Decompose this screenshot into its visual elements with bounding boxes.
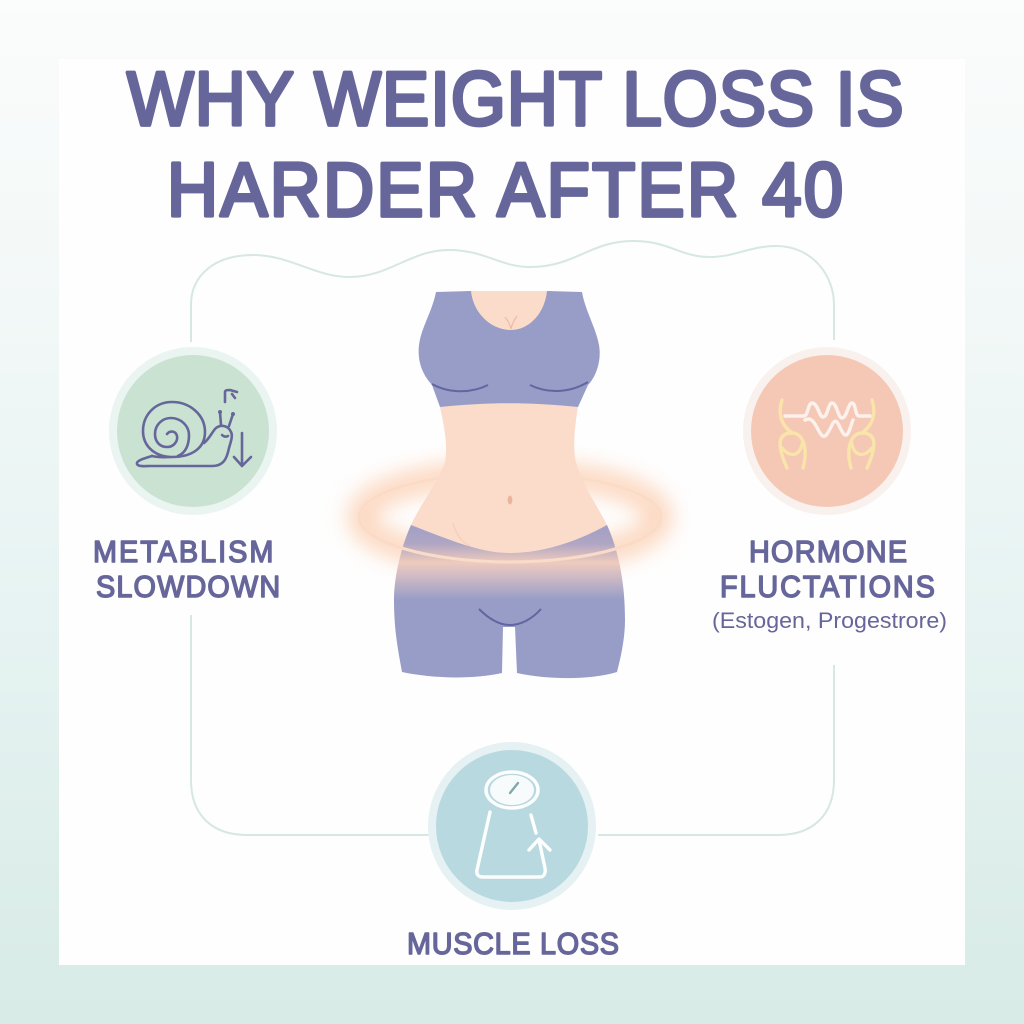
shorts xyxy=(394,525,625,678)
metabolism label xyxy=(93,535,280,604)
torso skin xyxy=(402,291,616,575)
waist ring front xyxy=(359,517,661,562)
muscle label: MUSCLE LOSS xyxy=(407,927,619,961)
title: HARDER AFTER 40 xyxy=(167,148,843,233)
scale dial xyxy=(490,775,534,805)
title: WHY WEIGHT LOSS IS xyxy=(127,57,904,142)
metabolism icon xyxy=(109,347,277,515)
metabolism label: METABLISM xyxy=(93,535,273,569)
hormone label: (Estogen, Progestrore) xyxy=(712,608,947,633)
waist ring glow and back arc xyxy=(359,473,661,561)
sports top xyxy=(419,291,600,407)
abdomen fold xyxy=(453,523,470,546)
navel xyxy=(508,496,512,504)
bust lines xyxy=(432,382,588,391)
muscle icon xyxy=(428,742,596,910)
hormone label xyxy=(712,535,947,633)
connector frame xyxy=(191,241,834,835)
metabolism label: SLOWDOWN xyxy=(96,570,280,604)
title xyxy=(127,57,904,233)
figure: torso with waist ring xyxy=(359,291,661,678)
icon: waves and figures xyxy=(780,400,874,468)
cleavage line xyxy=(505,316,517,329)
icon: snail xyxy=(137,390,251,466)
icon: scale with up arrow xyxy=(477,772,550,877)
white panel xyxy=(59,59,965,965)
hormone label: FLUCTATIONS xyxy=(720,570,935,604)
scale needle xyxy=(510,783,518,793)
crotch line xyxy=(479,609,541,625)
hormone icon xyxy=(743,347,911,515)
hormone label: HORMONE xyxy=(749,535,907,569)
